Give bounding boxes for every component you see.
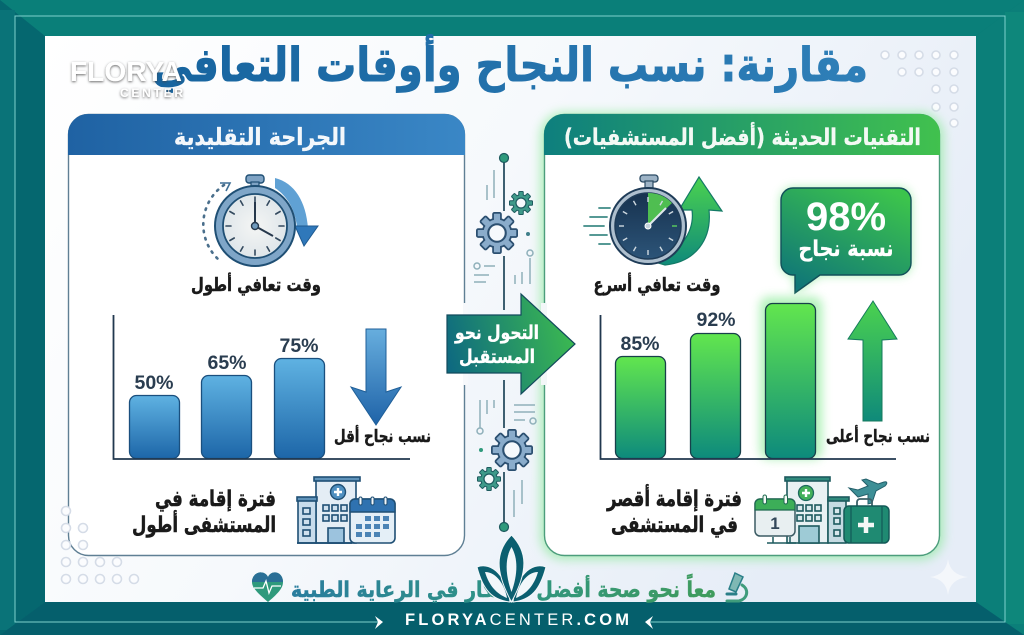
icon: bottom gear large: [492, 430, 532, 470]
panel header: [68, 114, 465, 155]
watermark logo: [70, 56, 183, 100]
panel heading: الجراحة التقليدية: [174, 123, 346, 151]
icon: top connector dot: [500, 154, 508, 162]
value 92%: 92%: [696, 309, 736, 331]
arrow: shift to the future: [447, 294, 575, 394]
decorative dots top right: [881, 51, 958, 127]
value 65%: 65%: [207, 352, 247, 374]
label: higher success: نسب نجاح أعلى: [826, 425, 930, 447]
callout: 98 percent: [781, 188, 911, 293]
text: longer hospital stay: المستشفى أطول: [132, 509, 276, 538]
text: shorter hospital stay: [606, 483, 742, 538]
panel: modern techniques: [252, 112, 968, 629]
value 75%: 75%: [279, 335, 319, 357]
icon: top gear small: [510, 192, 532, 214]
bar chart: modern: [600, 297, 896, 459]
label: lower success: نسب نجاح أقل: [334, 425, 431, 447]
callout value: 98%: [806, 195, 886, 239]
arrow label line 1: التحول نحو: [454, 322, 539, 344]
icon: bottom gear small: [478, 468, 500, 490]
logo wordmark: FLORYA: [70, 56, 182, 87]
left arrowhead: [375, 616, 383, 629]
right arrowhead: [645, 616, 653, 629]
panel header: [544, 114, 940, 155]
icon: hospital, calendar, plane and bag: [755, 477, 889, 543]
lotus logo: [477, 535, 546, 602]
icon: fast stopwatch: [584, 175, 722, 265]
footer slogan: معاً نحو صحة أفضل - ابتكار في الرعاية الطبية: [291, 573, 716, 603]
callout label: نسبة نجاح: [798, 237, 894, 262]
text: longer hospital stay: [132, 487, 276, 538]
website address: FLORYACENTER.COM: [405, 611, 629, 629]
icon: microscope: [727, 573, 747, 601]
logo subtitle: CENTER: [120, 86, 183, 100]
text: shorter hospital stay: فترة إقامة أقصر: [606, 483, 742, 512]
icon: top gear large: [477, 213, 517, 253]
decorative dots bottom left: [62, 506, 138, 584]
icon: slow stopwatch: [203, 175, 318, 266]
text: shorter hospital stay: في المستشفى: [611, 513, 738, 538]
value 50%: 50%: [134, 372, 174, 394]
panel: traditional surgery: [68, 114, 465, 556]
text: longer hospital stay: فترة إقامة في: [155, 487, 276, 512]
icon: hospital and calendar: [297, 477, 395, 543]
arrow: lower success: [351, 329, 401, 425]
bar chart: traditional: [114, 315, 410, 459]
footer website: [375, 611, 653, 629]
panel heading: التقنيات الحديثة (أفضل المستشفيات): [564, 121, 921, 151]
label: faster recovery: وقت تعافي أسرع: [594, 273, 720, 296]
decorative star: [930, 559, 968, 595]
title: مقارنة: نسب النجاح وأوقات التعافي: [152, 34, 868, 93]
value 85%: 85%: [620, 333, 660, 355]
arrow: higher success: [848, 301, 897, 421]
arrow label line 2: المستقبل: [459, 346, 535, 368]
icon: hospital, calendar, plane and bag: 1: [770, 514, 780, 533]
icon: heart pulse: [252, 572, 283, 602]
icon: bottom connector dot: [500, 522, 508, 532]
label: longer recovery: وقت تعافي أطول: [191, 273, 321, 296]
central connector with gears: [463, 154, 547, 532]
